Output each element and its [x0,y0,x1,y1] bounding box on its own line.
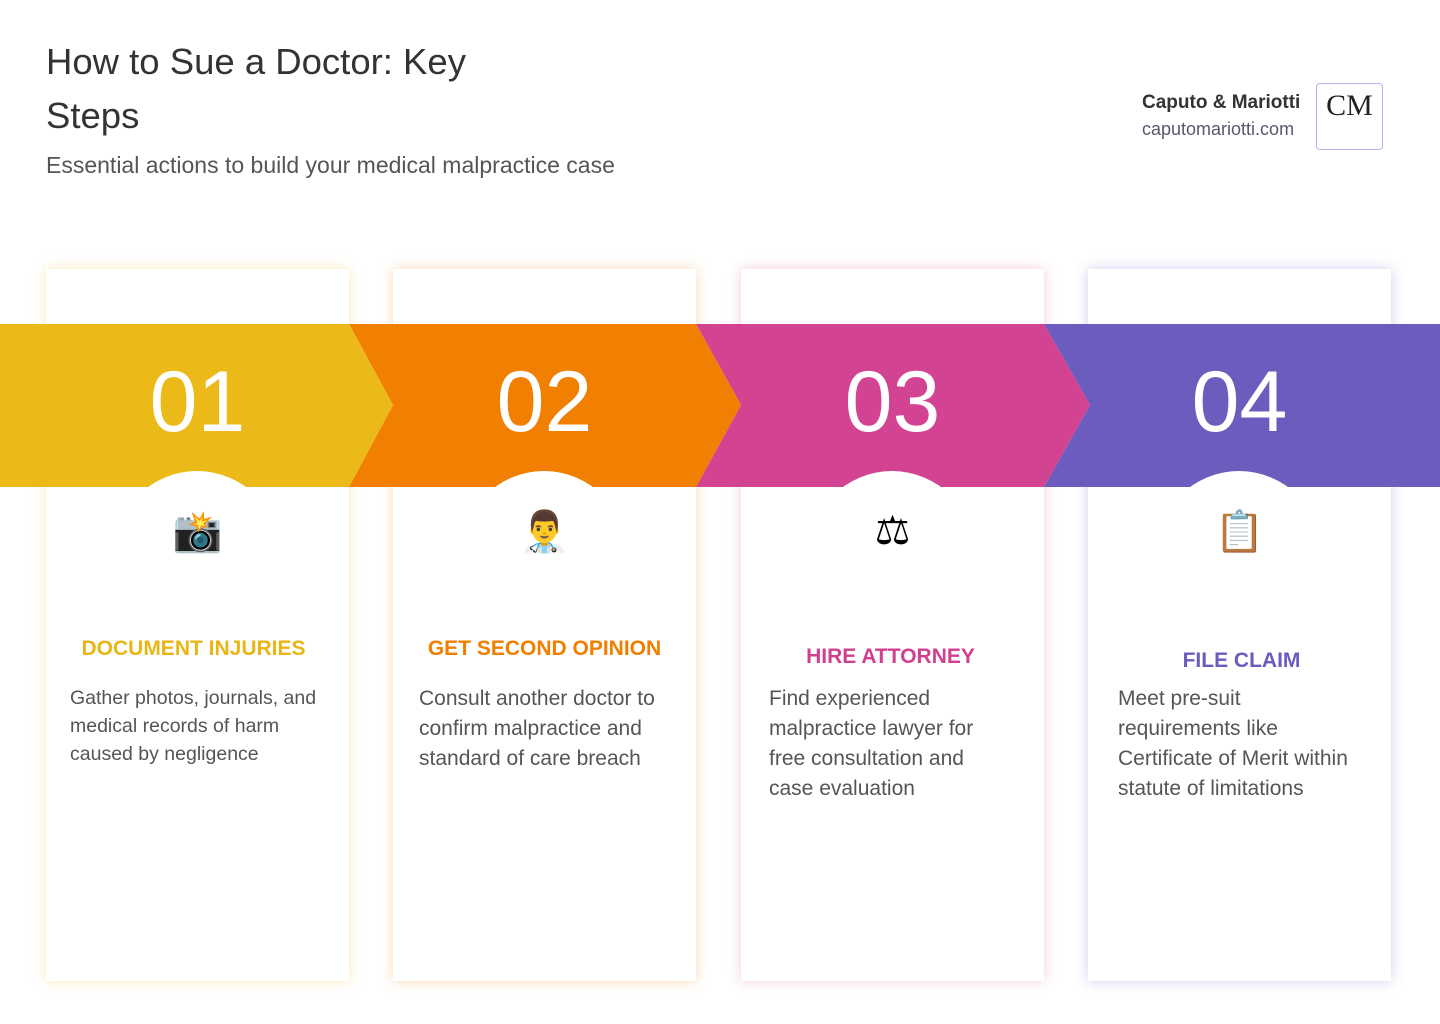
text: 02 [497,354,592,450]
subtitle: Essential actions to build your medical malpractice case [46,152,615,178]
circles [114,471,280,637]
text: Find experienced malpractice lawyer for free consultation and case evaluation [769,687,973,800]
cards [46,269,349,981]
brand: caputomariotti.com [1142,119,1294,139]
logo [1316,83,1383,150]
step 2: GET SECOND OPINION [428,637,661,660]
text: 04 [1192,354,1287,450]
icons: 📸 [173,509,222,555]
text: 👨‍⚕️ [520,509,569,555]
text: Consult another doctor to confirm malpractice and standard of care breach [419,687,655,770]
text: Gather photos, journals, and medical records of harm caused by negligence [70,687,316,765]
text: 📋 [1215,509,1264,555]
brand [1142,83,1383,150]
brand: Caputo & Mariotti [1142,92,1300,113]
text: 03 [845,354,940,450]
title: How to Sue a Doctor: Key Steps [46,41,466,136]
step 3: HIRE ATTORNEY [806,645,975,668]
logo: CM [1326,89,1373,122]
text: ⚖ [875,508,910,554]
step 1: DOCUMENT INJURIES [81,637,306,660]
text: Meet pre-suit requirements like Certificate of Merit within statute of limitations [1118,687,1348,800]
step 4: FILE CLAIM [1183,649,1300,672]
arrow band [0,324,1440,487]
numbers: 01 [150,354,245,450]
